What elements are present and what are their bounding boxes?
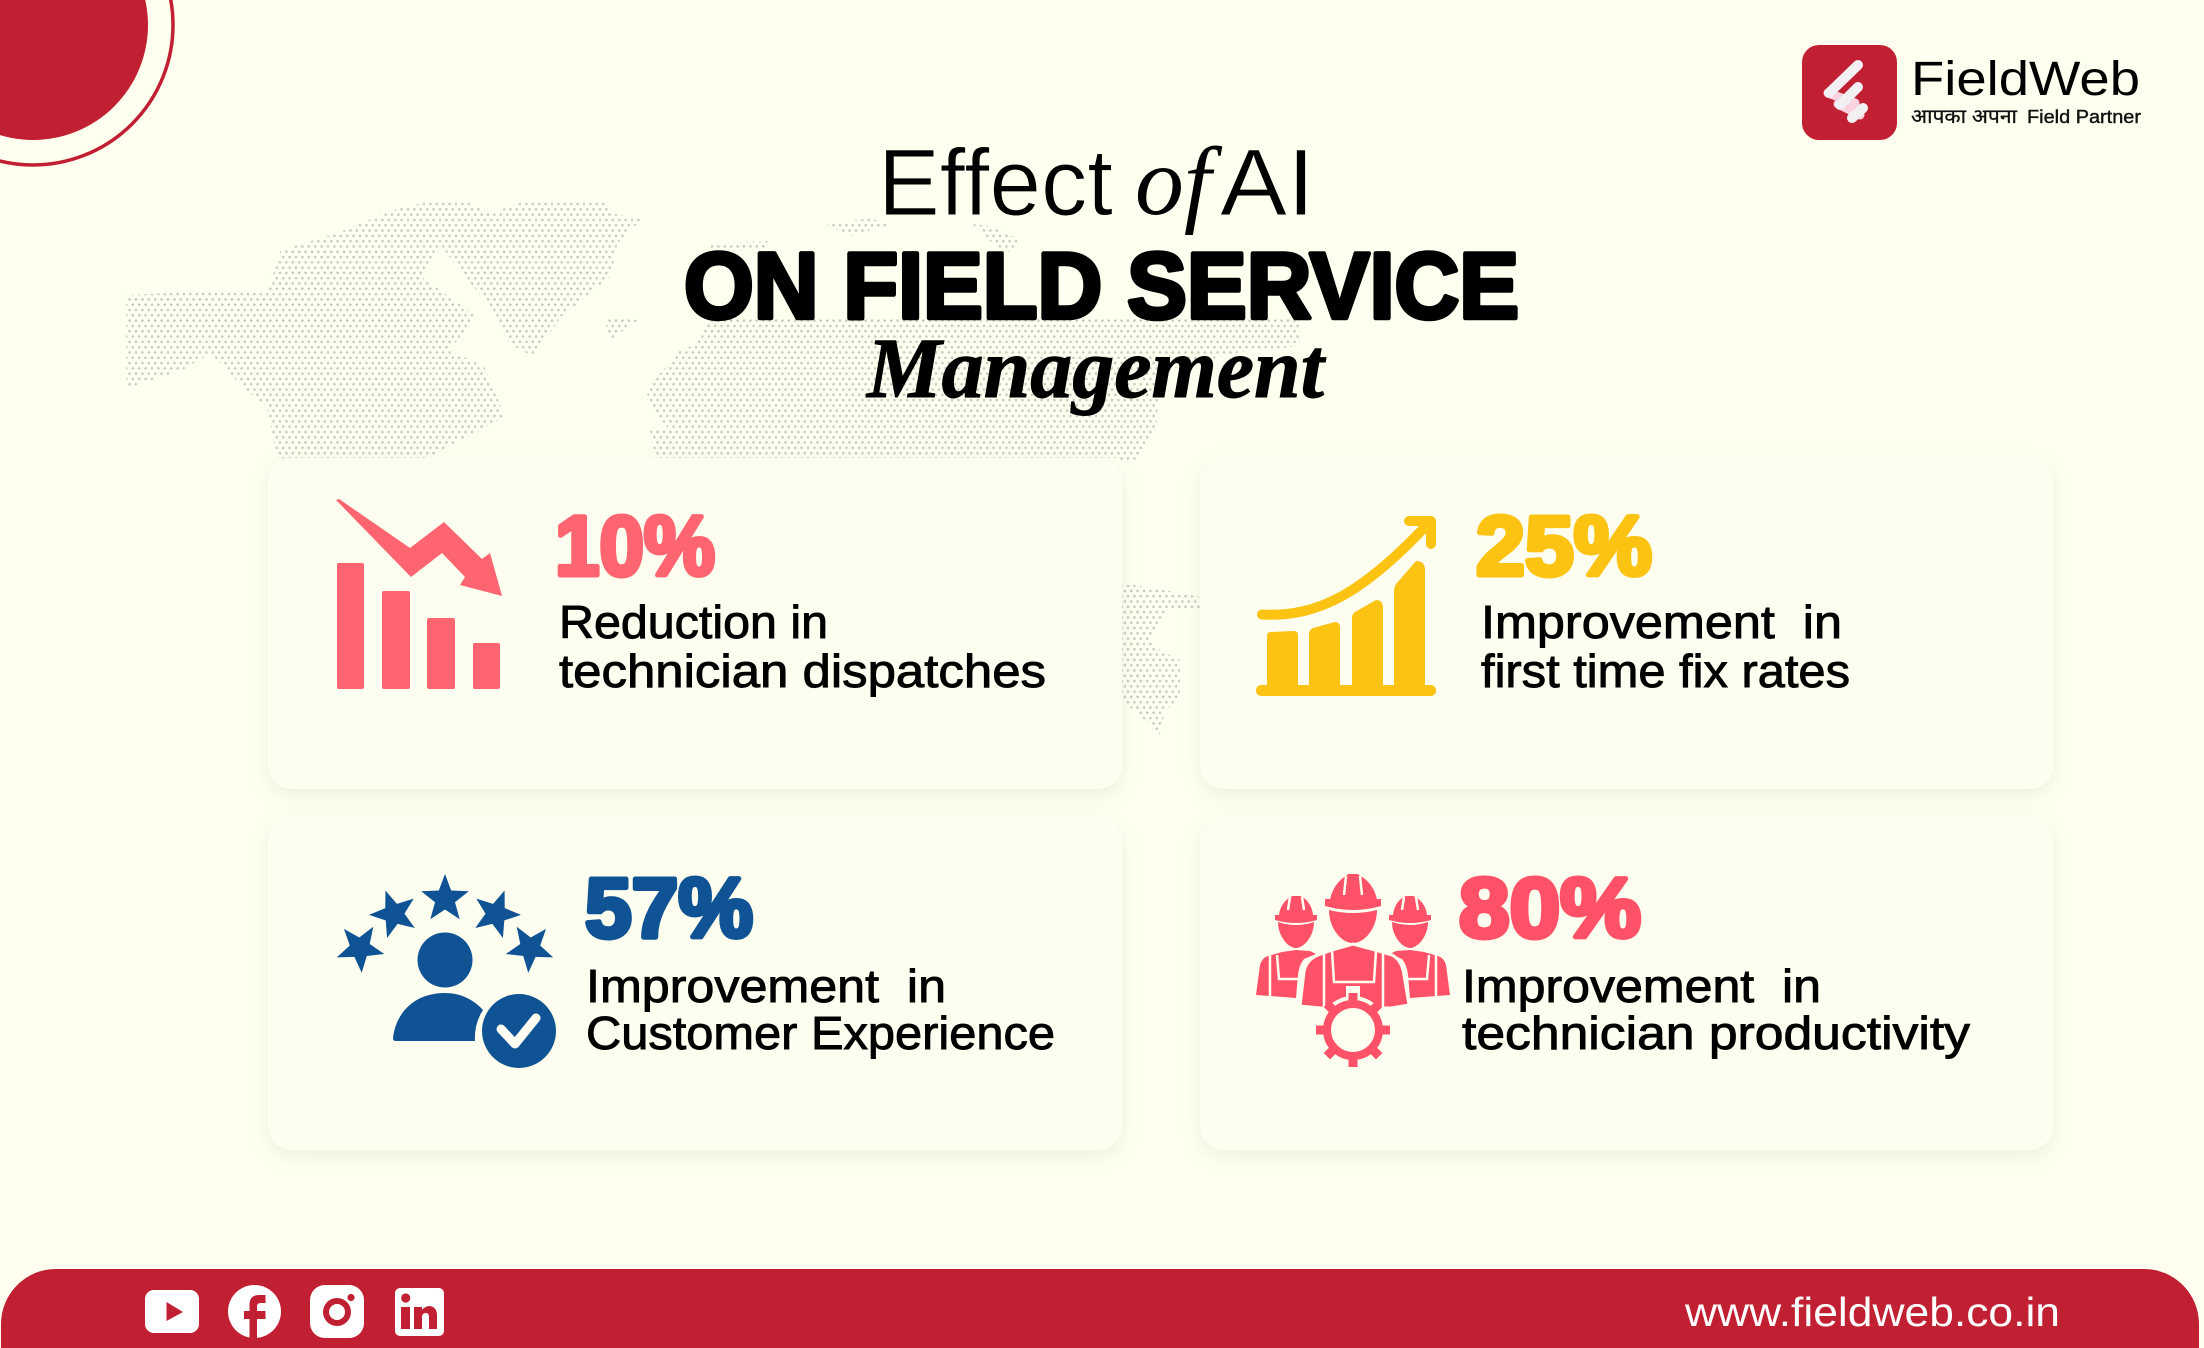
- icon: linkedin: [395, 1288, 444, 1336]
- description: Reduction in: [559, 596, 828, 648]
- title: [684, 128, 1519, 416]
- left worker: [1256, 896, 1317, 998]
- title line 1: AI: [1220, 130, 1315, 236]
- corner circle decoration: [0, 0, 173, 165]
- description: technician productivity: [1462, 1007, 1970, 1059]
- tagline: [1911, 106, 2141, 128]
- panel: reduction in dispatches: [268, 458, 1122, 789]
- stat: 25%: 25%: [1476, 499, 1652, 593]
- right worker: [1389, 896, 1450, 998]
- description: [1462, 960, 1970, 1059]
- icon: falling bar chart: [336, 499, 502, 689]
- title line 2: ON FIELD SERVICE: [684, 233, 1519, 338]
- panel: first time fix rates: [1200, 458, 2053, 789]
- dotted world map background: [126, 202, 1300, 735]
- brand name: FieldWeb: [1911, 53, 2140, 106]
- tagline: आपका अपना: [1911, 106, 2018, 128]
- stat: 80%: 80%: [1459, 861, 1641, 955]
- icon: instagram: [310, 1285, 364, 1338]
- center worker: [1300, 874, 1409, 1008]
- title line 1: Effect: [878, 130, 1113, 236]
- logo: FieldWeb: [1802, 45, 2141, 140]
- description: Improvement in: [1481, 596, 1842, 648]
- icon: technicians with gear: [1256, 874, 1450, 1067]
- icon: rising bar chart: [1256, 521, 1436, 696]
- tagline: Field Partner: [2027, 107, 2141, 127]
- icon: customer with stars: [326, 874, 564, 1068]
- description: [1481, 596, 1850, 697]
- description: [559, 596, 1046, 697]
- icon: youtube: [145, 1290, 199, 1333]
- panel: technician productivity: [1200, 818, 2053, 1150]
- description: Customer Experience: [586, 1007, 1055, 1059]
- stat: 10%: 10%: [555, 499, 715, 593]
- title line 3: Management: [865, 320, 1327, 416]
- description: Improvement in: [1462, 960, 1821, 1012]
- icon: FieldWeb bolt: [1802, 45, 1897, 140]
- title line 1: [878, 128, 1315, 236]
- description: first time fix rates: [1481, 645, 1850, 697]
- title line 1: of: [1135, 128, 1223, 236]
- icon: facebook: [228, 1285, 281, 1339]
- website url: www.fieldweb.co.in: [1684, 1289, 2060, 1335]
- stat: 57%: 57%: [585, 861, 753, 955]
- panel: customer experience: [268, 818, 1122, 1150]
- description: technician dispatches: [559, 645, 1046, 697]
- gear: [1316, 986, 1390, 1067]
- footer bar: [1, 1269, 2199, 1348]
- description: Improvement in: [586, 960, 946, 1012]
- description: [586, 960, 1055, 1059]
